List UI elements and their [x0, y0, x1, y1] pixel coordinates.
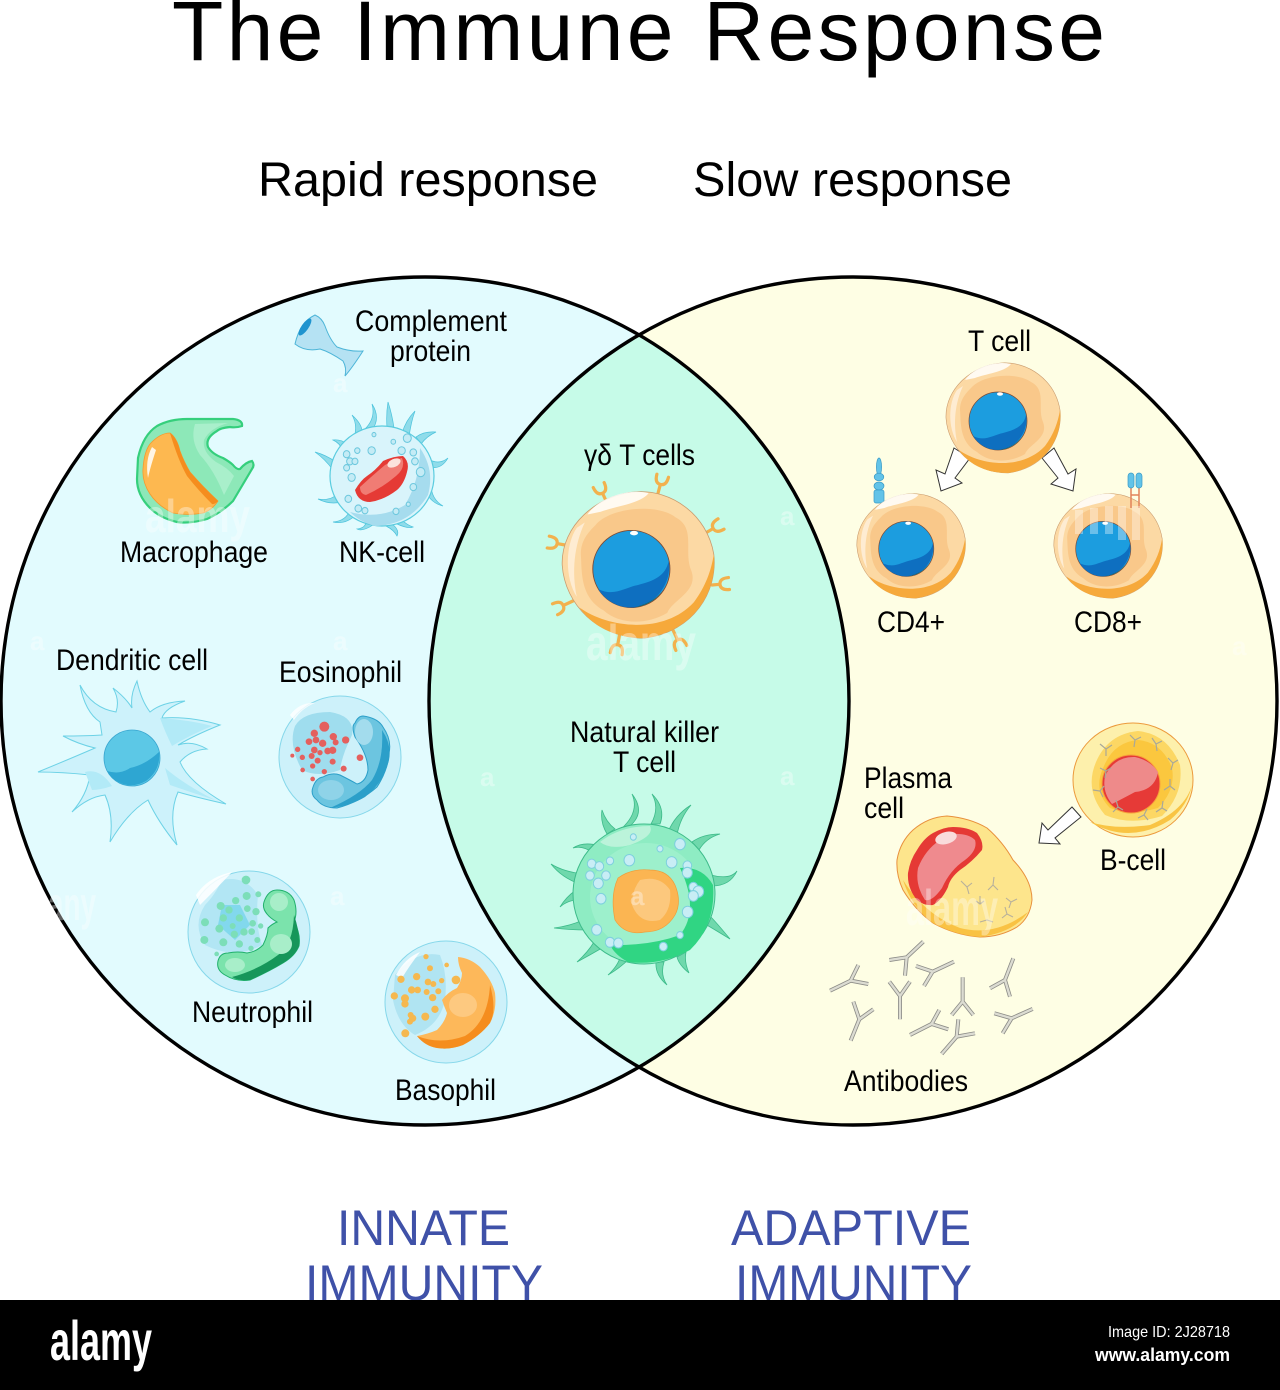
label: neutrophil: Neutrophil — [192, 996, 313, 1029]
label: t cell: T cell — [968, 325, 1031, 358]
watermarks: a — [1232, 631, 1247, 661]
footer logo: alamy: alamy — [50, 1309, 152, 1372]
icon: complement protein — [295, 315, 363, 376]
label: eosinophil: Eosinophil — [279, 656, 402, 689]
label: complement protein: Complement — [355, 305, 508, 338]
icon: cd4 receptor — [874, 458, 884, 503]
label: plasma cell: Plasma — [864, 762, 952, 795]
watermarks: a — [333, 368, 348, 398]
arrow: b-cell to plasma cell — [1039, 807, 1081, 844]
label: nk-cell: NK-cell — [339, 536, 425, 569]
label: basophil: Basophil — [395, 1074, 496, 1107]
panel: overlap region — [430, 337, 848, 1065]
watermarks: a — [780, 501, 795, 531]
label: complement protein — [355, 305, 508, 368]
label: plasma cell — [864, 762, 952, 825]
label: cd4: CD4+ — [877, 606, 945, 639]
footer url: www.alamy.com — [1094, 1345, 1230, 1365]
arrow: t cell to cd8 — [1042, 448, 1076, 491]
watermarks: a — [330, 881, 345, 911]
watermarks: a — [333, 626, 348, 656]
watermarks: alamy — [145, 490, 250, 542]
icon: gamma delta t cell — [547, 474, 729, 655]
watermarks: a — [780, 761, 795, 791]
heading: innate immunity — [305, 1200, 543, 1311]
label: dendritic cell: Dendritic cell — [56, 644, 208, 677]
icon: nk-cell — [315, 402, 448, 536]
heading: adaptive immunity — [731, 1200, 972, 1311]
heading: adaptive immunity: IMMUNITY — [735, 1255, 972, 1311]
label: gamma delta t cells: γδ T cells — [584, 439, 695, 472]
label: natural killer t cell: T cell — [613, 746, 676, 779]
label: macrophage: Macrophage — [120, 536, 268, 569]
heading: innate immunity: INNATE — [337, 1200, 510, 1256]
icon: cd4 t cell — [857, 494, 965, 598]
label: plasma cell: cell — [864, 792, 904, 825]
icon: dendritic cell — [38, 681, 226, 845]
icon: t cell — [946, 363, 1060, 473]
heading: innate immunity: IMMUNITY — [305, 1255, 543, 1311]
venn outlines — [1, 277, 1277, 1125]
watermarks: a — [480, 762, 495, 792]
heading: adaptive immunity: ADAPTIVE — [731, 1200, 971, 1256]
icon: plasma cell — [897, 816, 1032, 937]
icon: b-cell — [1073, 723, 1193, 837]
icon: neutrophil — [188, 871, 310, 993]
label: complement protein: protein — [390, 335, 471, 368]
icon: basophil — [385, 941, 507, 1063]
icon: eosinophil — [279, 696, 401, 818]
watermarks: any — [48, 878, 96, 930]
icon: cd8 t cell — [1054, 494, 1162, 598]
watermarks: a — [630, 881, 645, 911]
label: cd8: CD8+ — [1074, 606, 1142, 639]
footer bar — [0, 1300, 1280, 1390]
arrow: t cell to cd4 — [936, 448, 970, 491]
watermarks: alamy — [906, 880, 998, 936]
panel: innate immunity circle — [1, 277, 849, 1125]
icon: cd8 receptor — [1075, 473, 1142, 540]
watermarks: alamy — [586, 615, 696, 671]
icon: macrophage — [137, 419, 254, 523]
panel: adaptive immunity circle — [429, 277, 1277, 1125]
label: b-cell: B-cell — [1100, 844, 1166, 877]
label: natural killer t cell — [570, 716, 719, 779]
heading: slow response: Slow response — [693, 154, 1012, 207]
icon: natural killer t cell — [551, 794, 737, 985]
footer image id: Image ID: 2J28718 — [1108, 1324, 1230, 1341]
watermarks: a — [30, 626, 45, 656]
label: natural killer t cell: Natural killer — [570, 716, 719, 749]
watermarks — [30, 368, 1247, 936]
heading: rapid response: Rapid response — [258, 154, 598, 207]
icon: antibodies — [830, 942, 1033, 1054]
label: antibodies: Antibodies — [844, 1065, 968, 1098]
